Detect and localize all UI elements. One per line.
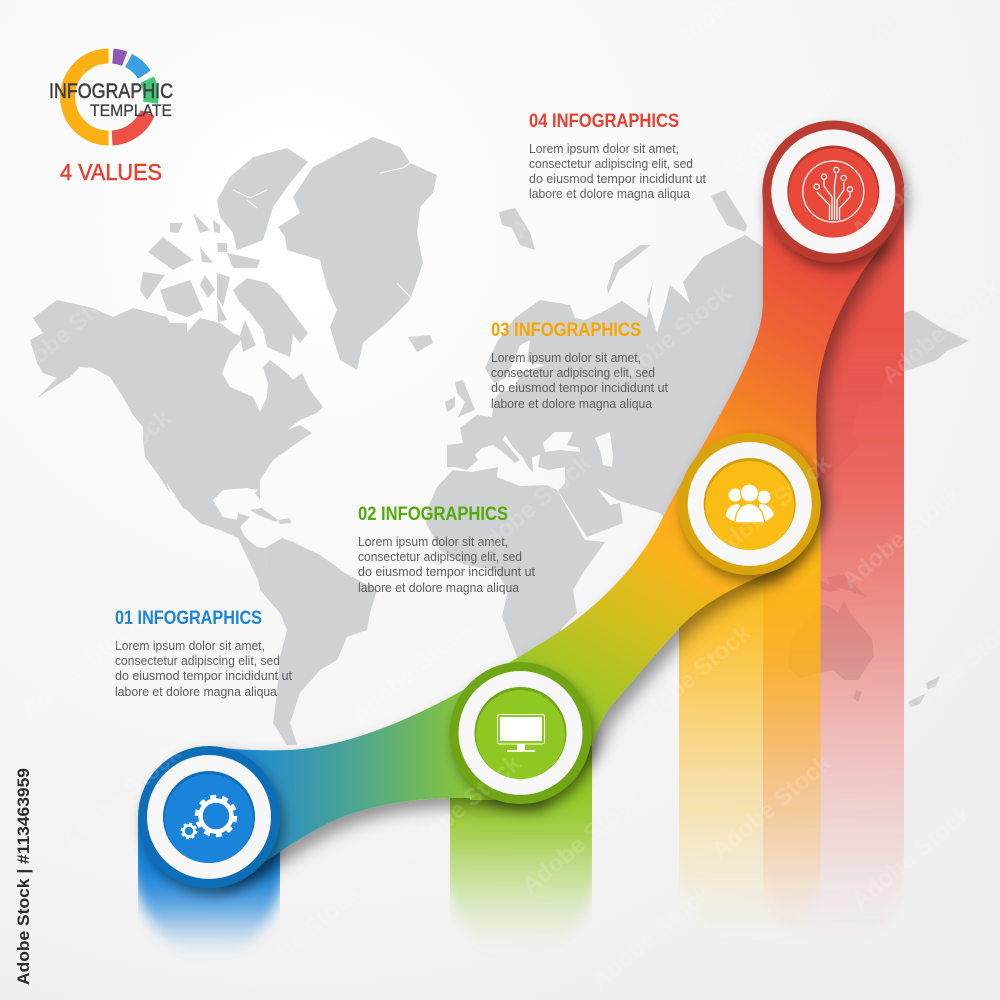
- text block: 03 infographics: labore et dolore magna aliqua: [491, 396, 653, 411]
- watermark pattern: Adobe Stock: [627, 619, 757, 735]
- text block: 02 infographics: [358, 504, 535, 595]
- map: canadian arctic islands: [140, 148, 308, 357]
- icon: gears: [182, 797, 235, 838]
- logo donut segments: [68, 56, 151, 138]
- ribbon: blue to green section: [209, 655, 540, 880]
- node 3: orange circle with people: [679, 433, 821, 575]
- watermark pattern: Adobe Stock: [517, 784, 647, 900]
- map: new zealand: [908, 676, 940, 707]
- node 4: red circle with circuit: [762, 120, 904, 262]
- map: australia, papua and indonesia: [788, 575, 874, 702]
- text block: 01 infographics: labore et dolore magna aliqua: [115, 684, 278, 699]
- text block: 04 infographics: consectetur adipiscing elit, sed: [529, 156, 693, 171]
- watermark pattern: Adobe Stock: [2, 274, 132, 390]
- text block: 02 infographics: do eiusmod tempor incididunt ut: [358, 564, 535, 579]
- watermark pattern: Adobe Stock: [847, 129, 977, 245]
- column: green bar: [450, 745, 592, 943]
- column: blue bar: [138, 818, 280, 952]
- node 1: blue circle with gears: [138, 746, 280, 888]
- column: red bar: [763, 198, 904, 915]
- map: eurasia: [447, 235, 969, 600]
- map: caribbean islands: [250, 508, 291, 524]
- text block: 02 infographics: Lorem ipsum dolor sit amet,: [358, 534, 508, 549]
- text block: 03 infographics: Lorem ipsum dolor sit amet,: [491, 350, 641, 365]
- watermark pattern: Adobe Stock: [337, 284, 467, 400]
- logo title: INFOGRAPHIC: [49, 80, 173, 103]
- icon: circuit tree: [803, 161, 864, 222]
- text block: 02 infographics: labore et dolore magna aliqua: [358, 580, 520, 595]
- map: british isles: [445, 380, 475, 417]
- watermark pattern: Adobe Stock: [57, 739, 187, 855]
- text block: 01 infographics: 01 INFOGRAPHICS: [115, 608, 262, 629]
- watermark pattern: Adobe Stock: [347, 614, 477, 730]
- text block: 04 infographics: Lorem ipsum dolor sit amet,: [529, 141, 679, 156]
- text block: 03 infographics: do eiusmod tempor incididunt ut: [491, 380, 668, 395]
- watermark pattern: Adobe Stock: [47, 404, 177, 520]
- watermark pattern: Adobe Stock: [717, 69, 847, 185]
- watermark pattern: Adobe Stock: [607, 279, 737, 395]
- map: greenland: [278, 137, 437, 370]
- text block: 04 infographics: [529, 111, 706, 201]
- text block: 04 infographics: labore et dolore magna aliqua: [529, 186, 691, 201]
- column: orange bar: [679, 510, 820, 918]
- text block: 02 infographics: consectetur adipiscing elit, sed: [358, 549, 522, 564]
- stock id label: Adobe Stock | #113463959: [14, 768, 33, 985]
- map: iceland: [408, 335, 433, 352]
- text block: 04 infographics: do eiusmod tempor incididunt ut: [529, 171, 706, 186]
- watermark pattern: Adobe Stock: [707, 449, 837, 565]
- logo: donut chart with title: [49, 56, 173, 185]
- map: africa: [426, 467, 605, 670]
- ribbon connecting the four nodes: [209, 191, 887, 880]
- node 2: green circle with monitor: [450, 662, 592, 804]
- watermark pattern: Adobe Stock: [707, 749, 837, 865]
- logo caption: 4 VALUES: [60, 159, 162, 185]
- watermark pattern: Adobe Stock: [847, 799, 977, 915]
- watermark pattern: Adobe Stock: [17, 609, 147, 725]
- text block: 03 infographics: [491, 320, 668, 411]
- text block: 04 infographics: 04 INFOGRAPHICS: [529, 111, 679, 132]
- icon: monitor: [498, 714, 544, 752]
- map: south america: [258, 538, 377, 745]
- text block: 03 infographics: consectetur adipiscing elit, sed: [491, 365, 655, 380]
- watermark pattern: Adobe Stock: [507, 129, 637, 245]
- map: japan: [822, 433, 860, 478]
- icon: people group: [726, 484, 774, 523]
- text block: 02 infographics: 02 INFOGRAPHICS: [358, 504, 508, 525]
- ribbon: green to red section: [470, 191, 887, 800]
- text block: 03 infographics: 03 INFOGRAPHICS: [491, 320, 641, 341]
- text block: 01 infographics: [115, 608, 292, 699]
- world map: [30, 137, 969, 745]
- logo subtitle: TEMPLATE: [90, 101, 172, 120]
- text block: 01 infographics: Lorem ipsum dolor sit amet,: [115, 638, 265, 653]
- watermark pattern: Adobe Stock: [397, 749, 527, 865]
- watermark pattern: Adobe Stock: [467, 449, 597, 565]
- text block: 01 infographics: do eiusmod tempor incididunt ut: [115, 668, 292, 683]
- watermark pattern: Adobe Stock: [587, 879, 717, 995]
- map: north america: [30, 300, 323, 580]
- watermark pattern: Adobe Stock: [167, 114, 297, 230]
- text block: 01 infographics: consectetur adipiscing elit, sed: [115, 653, 280, 668]
- watermark pattern: Adobe Stock: [237, 879, 367, 995]
- watermark pattern: Adobe Stock: [837, 479, 967, 595]
- map: novaya zemlya and svalbard: [499, 190, 747, 294]
